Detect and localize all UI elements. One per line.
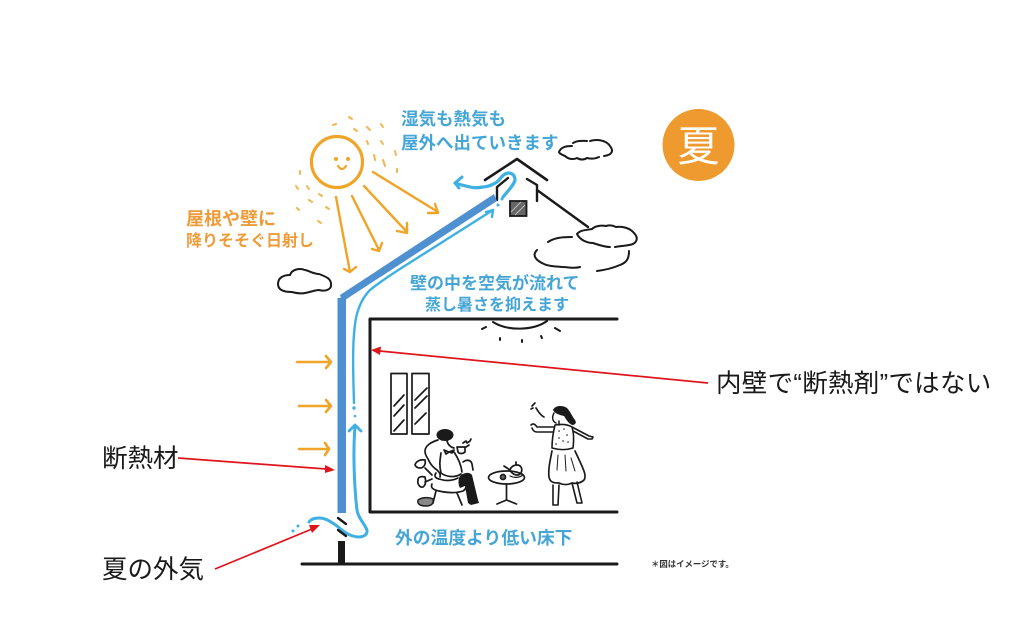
clouds	[278, 140, 637, 293]
sunlight arrows	[336, 172, 438, 272]
callout: inner wall	[371, 346, 992, 398]
dancing woman	[531, 403, 593, 505]
note: ＊図はイメージです。	[651, 559, 734, 569]
heading: sunlight on roof and walls: 屋根や壁に	[186, 209, 276, 229]
callout: insulation	[102, 445, 335, 473]
sitting man in armchair with plant	[415, 429, 479, 506]
round table with teapot	[488, 462, 524, 504]
air flow dots	[292, 198, 504, 532]
callout: summer outside air: 夏の外気	[102, 556, 204, 584]
heading: sunlight on roof and walls: 降りそそぐ日射し	[186, 232, 314, 250]
heading: air flows through the wall	[410, 273, 580, 314]
room outline	[370, 319, 617, 512]
windows	[391, 374, 429, 434]
insulation: roof and wall band	[338, 194, 497, 513]
heading: moisture and heat exit: 屋外へ出ていきます	[401, 133, 558, 153]
heading: moisture and heat exit: 湿気も熱気も	[401, 109, 506, 129]
callout: summer outside air	[102, 525, 320, 584]
heading: air flows through the wall: 壁の中を空気が流れて	[410, 273, 580, 293]
heading: moisture and heat exit	[401, 109, 558, 153]
callout: inner wall: 内壁で“断熱剤”ではない	[716, 370, 992, 398]
heading: sunlight on roof and walls	[186, 209, 314, 250]
air flow inside the wall	[309, 173, 515, 537]
heading: crawl space cooler than outside: 外の温度より低い床下	[395, 528, 572, 548]
heading: air flows through the wall: 蒸し暑さを抑えます	[425, 296, 569, 314]
icon: ceiling light	[482, 321, 560, 342]
sunlight arrows on the wall	[297, 356, 331, 455]
icon: sun with face and rays	[296, 117, 397, 223]
roof outline and vent	[485, 159, 588, 227]
badge: summer	[662, 109, 734, 181]
callout: insulation: 断熱材	[102, 445, 179, 473]
foundation and ground	[302, 518, 617, 564]
badge: summer: 夏	[677, 123, 720, 170]
